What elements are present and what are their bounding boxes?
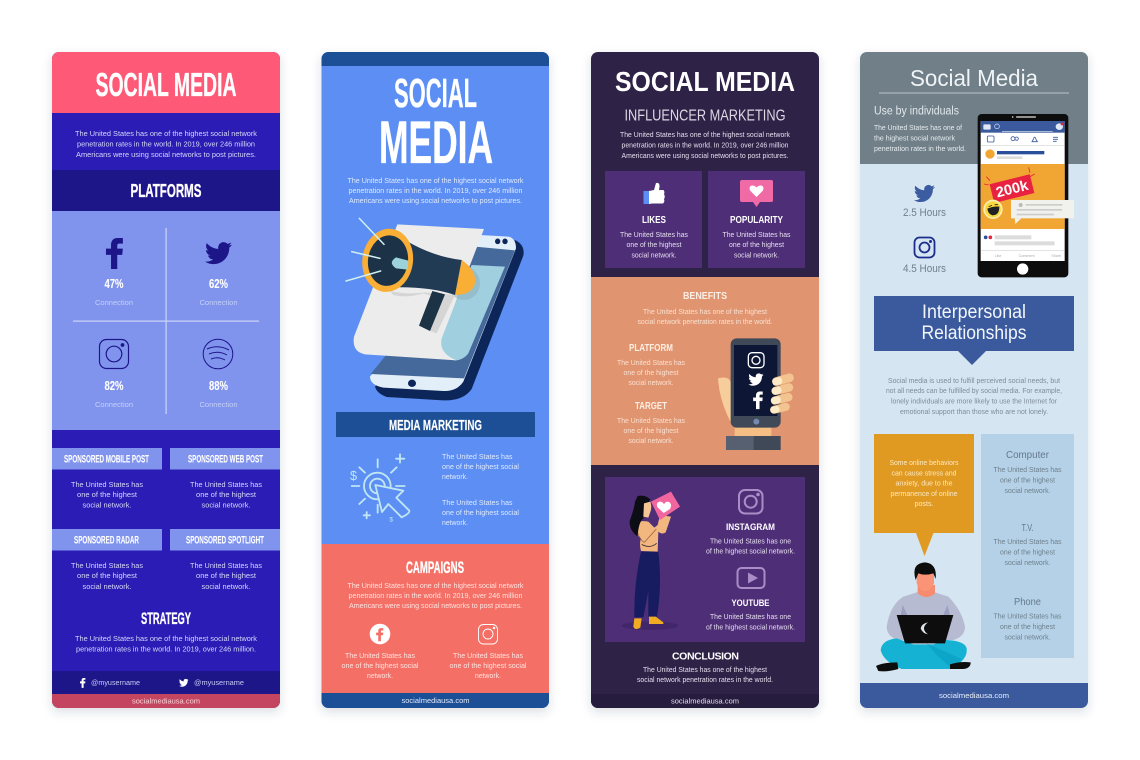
illustration: man with laptop: [876, 562, 971, 671]
campaigns section: [322, 544, 549, 693]
platform block: [617, 343, 685, 387]
social handles footer: @myusername: [91, 678, 140, 687]
conclusion: [637, 650, 773, 684]
campaigns text: [348, 581, 524, 610]
target block: TARGET: [635, 401, 667, 412]
card: sponsored spotlight: SPONSORED SPOTLIGHT: [186, 534, 264, 546]
campaigns heading: CAMPAIGNS: [406, 558, 464, 577]
body text: emotional support than those who are not lonely.: [900, 407, 1048, 416]
platforms grid panel: [52, 211, 280, 430]
intro text: the highest social network: [874, 134, 955, 142]
card: popularity: The United States has: [722, 230, 791, 239]
card: sponsored spotlight: one of the highest: [196, 571, 257, 580]
stat: instagram hours: [903, 238, 946, 275]
illustration: megaphone over phone: [346, 218, 524, 400]
social handles footer: [52, 671, 280, 694]
marketing text: network.: [442, 518, 468, 527]
icon: spotify: [203, 339, 233, 369]
callout: online behaviors: posts.: [914, 499, 934, 508]
card: instagram and youtube: of the highest social network.: [706, 622, 795, 632]
phone block: The United States has: [994, 612, 1062, 620]
platform block: social network.: [628, 378, 674, 387]
intro text: [874, 123, 966, 153]
intro text: [348, 176, 524, 205]
tv block: T.V.: [1022, 523, 1034, 534]
interpersonal relationships heading: [874, 296, 1074, 365]
card: popularity: one of the highest: [729, 240, 785, 249]
card: sponsored web post: one of the highest: [196, 490, 257, 499]
card: sponsored spotlight: The United States has: [190, 561, 262, 570]
stat: facebook 47%: [95, 279, 133, 305]
card: popularity: [708, 171, 805, 268]
title: Social Media: [910, 65, 1038, 91]
marketing text: one of the highest social: [442, 462, 519, 471]
icon: instagram: [478, 624, 498, 644]
intro text: The United States has one of the highest social network: [75, 129, 257, 138]
campaigns text: Americans were using social networks to post pictures.: [349, 601, 522, 610]
card: likes: one of the highest: [626, 240, 682, 249]
phone block: one of the highest: [1000, 622, 1056, 631]
strategy text: [75, 636, 257, 653]
benefits section: BENEFITS: [683, 290, 727, 302]
marketing text: one of the highest social: [442, 508, 519, 517]
campaign text right: [450, 652, 526, 678]
intro text: Americans were using social networks to post pictures.: [349, 196, 522, 205]
card: sponsored mobile post: social network.: [82, 500, 132, 510]
campaign text right: network.: [475, 671, 501, 680]
card: sponsored mobile post: SPONSORED MOBILE POST: [64, 454, 149, 466]
card: instagram and youtube: of the highest social network.: [706, 546, 795, 556]
marketing text: The United States has: [442, 498, 513, 507]
title: MEDIA: [379, 109, 493, 176]
marketing text: network.: [442, 472, 468, 481]
tv block: The United States has: [994, 537, 1062, 546]
subtitle: INFLUENCER MARKETING: [624, 108, 786, 124]
icon: click cursor: $: [389, 516, 393, 523]
header band: [52, 52, 280, 113]
tv block: one of the highest: [1000, 548, 1056, 556]
callout: online behaviors: permanence of online: [890, 489, 958, 498]
computer block: [994, 450, 1062, 495]
panel: influencer marketing infographic: [591, 52, 819, 708]
intro text: Americans were using social networks to post pictures.: [76, 150, 256, 159]
stat: twitter hours: [903, 185, 946, 219]
target block: The United States has: [617, 416, 685, 425]
intro text: [75, 129, 257, 159]
website footer: socialmediausa.com: [671, 696, 739, 706]
stat: spotify 88%: [200, 381, 238, 407]
card: sponsored web post: The United States has: [190, 480, 262, 489]
body text: [886, 376, 1062, 416]
illustration: phone with social feed: Like: [995, 254, 1001, 258]
card: sponsored radar: SPONSORED RADAR: [74, 534, 139, 546]
icon: click cursor: $: [350, 469, 357, 483]
icon: thumbs up: [644, 183, 665, 204]
stat: instagram 82%: 82%: [104, 379, 124, 393]
strategy text: The United States has one of the highest social network: [75, 634, 257, 643]
intro text: The United States has one of: [874, 123, 963, 132]
computer block: The United States has: [994, 465, 1062, 474]
illustration: woman with like sign: [622, 492, 680, 630]
intro text: penetration rates in the world. In 2019, over 246 million: [348, 186, 522, 195]
intro text: Americans were using social networks to post pictures.: [622, 151, 788, 160]
campaigns text: The United States has one of the highest social network: [348, 581, 524, 590]
conclusion: The United States has one of the highest: [643, 665, 768, 674]
phone block: Phone: [1014, 597, 1041, 608]
title: SOCIAL MEDIA: [96, 66, 236, 103]
icon: heart speech bubble: [740, 180, 773, 207]
website footer: socialmediausa.com: [132, 696, 200, 706]
tv block: [994, 523, 1062, 567]
website footer: [591, 694, 819, 708]
icon: facebook circle: [370, 624, 390, 644]
card: device usage: [981, 434, 1074, 658]
card: sponsored web post: SPONSORED WEB POST: [188, 454, 263, 466]
card: instagram and youtube: [605, 477, 805, 642]
stat: facebook 47%: 47%: [104, 277, 124, 291]
card: instagram and youtube: YOUTUBE: [732, 598, 770, 609]
computer block: Computer: [1006, 450, 1050, 461]
website footer: socialmediausa.com: [402, 696, 470, 705]
stat: twitter 62%: Connection: [200, 298, 238, 307]
campaign text right: one of the highest social: [450, 661, 527, 670]
stat: spotify 88%: Connection: [200, 400, 238, 409]
stat: instagram hours: 4.5 Hours: [903, 263, 946, 275]
benefits section: [591, 277, 819, 465]
panel: platforms infographic: [52, 52, 280, 708]
interpersonal relationships heading: Relationships: [922, 323, 1026, 344]
card: sponsored web post: [170, 448, 280, 510]
benefits section: social network penetration rates in the world.: [638, 317, 772, 326]
subheading: Use by individuals: [874, 106, 959, 118]
card: popularity: social network.: [734, 250, 779, 260]
title: SOCIAL MEDIA: [615, 66, 795, 97]
icon: twitter: [205, 242, 232, 264]
panel: use by individuals infographic: [860, 52, 1088, 708]
card: sponsored mobile post: The United States has: [71, 480, 143, 489]
illustration: hand holding phone: [718, 338, 795, 450]
platforms heading: PLATFORMS: [130, 180, 202, 201]
intro text: penetration rates in the world. In 2019, over 246 million: [77, 140, 255, 148]
icon: instagram: [739, 490, 762, 514]
intro text: penetration rates in the world. In 2019, over 246 million: [622, 140, 788, 150]
card: sponsored radar: social network.: [82, 582, 132, 591]
intro text: [620, 130, 790, 160]
campaign text left: network.: [367, 671, 393, 680]
illustration: phone with social feed: 200k: [994, 178, 1031, 201]
card: instagram and youtube: The United States has one: [710, 536, 791, 546]
card: likes: The United States has: [620, 230, 688, 239]
icon: click cursor: [350, 454, 409, 523]
media marketing heading: MEDIA MARKETING: [389, 417, 482, 434]
intro text: The United States has one of the highest social network: [348, 176, 524, 185]
platforms heading bar: [52, 170, 280, 211]
media marketing heading: [336, 412, 535, 437]
strategy text: penetration rates in the world. In 2019, over 246 million.: [76, 644, 256, 654]
panel: media marketing infographic: [322, 52, 549, 708]
callout: online behaviors: can cause stress and: [892, 468, 956, 478]
card: popularity: POPULARITY: [730, 215, 783, 226]
title: SOCIAL: [394, 70, 477, 116]
target block: one of the highest: [624, 426, 679, 435]
illustration: phone with social feed: [978, 114, 1074, 277]
card: sponsored mobile post: [52, 448, 162, 510]
stat: twitter 62%: [200, 279, 238, 305]
card: sponsored web post: social network.: [202, 500, 250, 510]
stat: facebook 47%: Connection: [95, 298, 133, 307]
title: [381, 78, 492, 164]
website footer: socialmediausa.com: [939, 691, 1009, 700]
tv block: social network.: [1004, 558, 1050, 567]
target block: [617, 401, 685, 445]
body text: Social media is used to fulfill perceived social needs, but: [888, 376, 1061, 385]
card: likes: LIKES: [642, 215, 666, 226]
campaign text left: The United States has: [345, 651, 415, 660]
conclusion: CONCLUSION: [672, 650, 739, 662]
phone block: [994, 597, 1062, 642]
marketing text: The United States has: [442, 452, 513, 461]
callout: online behaviors: [874, 434, 974, 556]
target block: social network.: [628, 436, 674, 445]
marketing text: [442, 452, 519, 527]
intro text: The United States has one of the highest social network: [620, 130, 790, 139]
card: sponsored radar: The United States has: [71, 561, 143, 570]
stat: twitter hours: 2.5 Hours: [903, 207, 946, 219]
icon: facebook: [106, 238, 123, 269]
phone block: social network.: [1004, 632, 1050, 642]
callout: online behaviors: Some online behaviors: [890, 458, 959, 467]
campaign text left: one of the highest social: [342, 661, 419, 670]
body text: lonely individuals are more likely to use the Internet for: [891, 396, 1057, 406]
computer block: one of the highest: [1000, 476, 1056, 484]
website footer: [860, 683, 1088, 708]
icon: instagram: [100, 340, 128, 368]
campaigns text: penetration rates in the world. In 2019, over 246 million: [348, 591, 522, 600]
stat: instagram 82%: Connection: [95, 400, 133, 409]
card: sponsored radar: one of the highest: [77, 571, 138, 580]
illustration: phone with social feed: Share: [1051, 254, 1061, 258]
computer block: social network.: [1004, 486, 1050, 495]
card: likes: social network.: [632, 250, 676, 260]
conclusion: social network penetration rates in the world.: [637, 675, 773, 684]
benefits section: The United States has one of the highest: [643, 307, 768, 316]
icon: youtube: [738, 568, 764, 588]
card: sponsored spotlight: social network.: [202, 582, 250, 591]
card: likes: [605, 171, 702, 268]
callout: online behaviors: anxiety, due to the: [896, 478, 952, 488]
platform block: The United States has: [617, 358, 685, 367]
platform block: one of the highest: [624, 368, 679, 377]
campaign text left: [342, 652, 418, 678]
social handles footer: @myusername: [194, 678, 244, 687]
stat: instagram 82%: [95, 381, 133, 407]
body text: not all needs can be fulfilled by social media. For example,: [886, 386, 1062, 395]
illustration: phone with social feed: Comment: [1019, 254, 1035, 258]
platform block: PLATFORM: [629, 343, 673, 354]
card: sponsored mobile post: one of the highest: [77, 490, 138, 499]
card: sponsored spotlight: [170, 529, 280, 591]
card: instagram and youtube: INSTAGRAM: [726, 522, 775, 533]
campaign text right: The United States has: [453, 651, 523, 660]
stat: spotify 88%: 88%: [209, 379, 228, 393]
strategy heading: STRATEGY: [141, 609, 191, 628]
website footer: [52, 694, 280, 708]
stat: twitter 62%: 62%: [209, 277, 228, 291]
website footer: [322, 693, 549, 708]
intro text: penetration rates in the world.: [874, 144, 966, 153]
card: sponsored radar: [52, 529, 162, 591]
interpersonal relationships heading: Interpersonal: [922, 302, 1026, 323]
card: instagram and youtube: The United States has one: [710, 612, 791, 621]
